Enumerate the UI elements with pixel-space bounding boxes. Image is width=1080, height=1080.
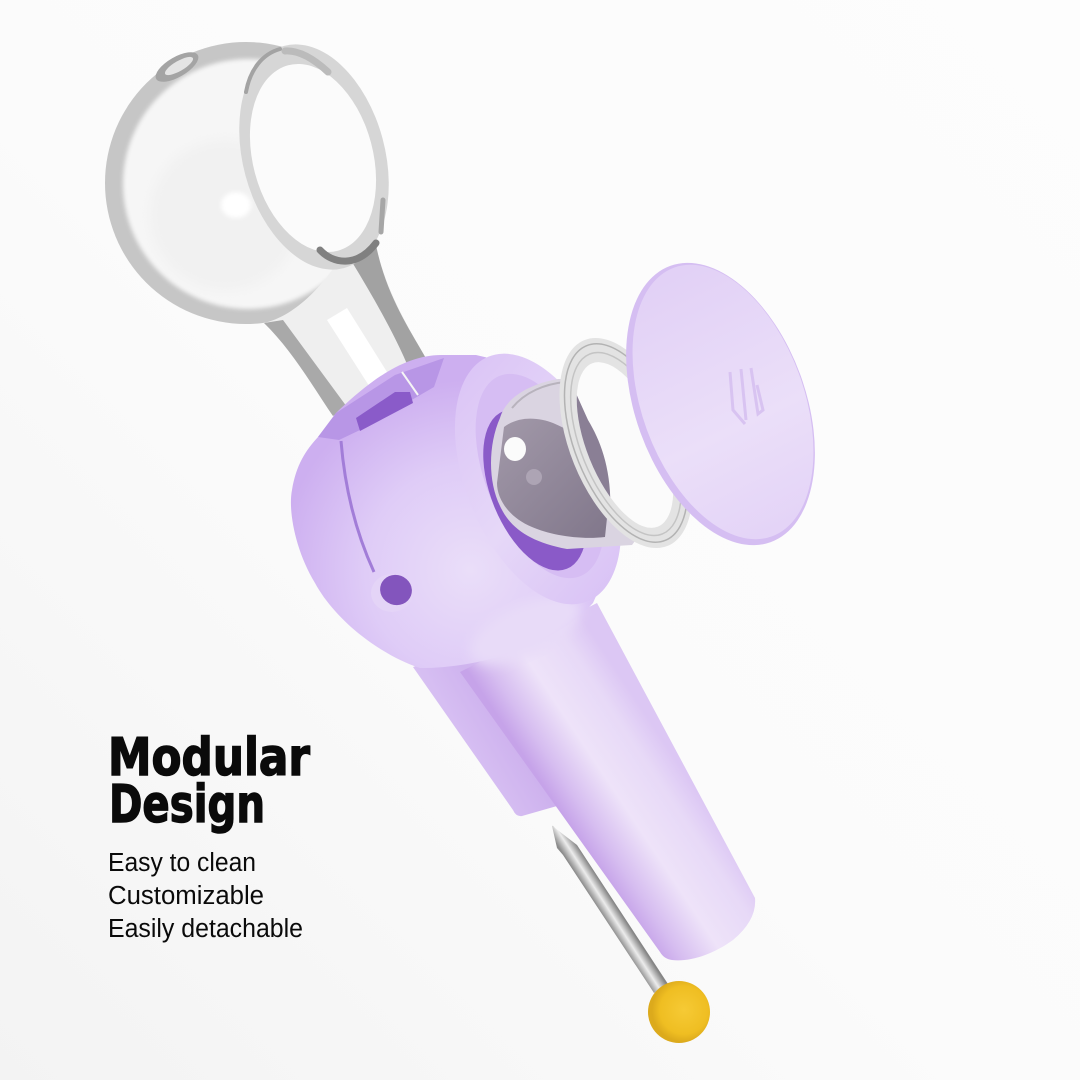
feature list: Easy to clean — [108, 849, 256, 877]
stem socket — [318, 358, 444, 440]
heading: Design — [109, 775, 265, 835]
purple disc lid — [590, 237, 851, 571]
slot in sphere — [341, 441, 374, 572]
bowl sphere — [105, 42, 387, 324]
logo mark — [730, 368, 763, 424]
glass bowl and stem — [105, 28, 427, 416]
sphere — [291, 355, 612, 668]
bowl rim — [216, 28, 412, 286]
feature list: Easily detachable — [108, 915, 303, 943]
carb hole — [151, 46, 203, 88]
lower flap — [413, 640, 557, 816]
purple silicone body — [291, 330, 755, 960]
yellow ball — [648, 981, 710, 1043]
feature list: Customizable — [108, 882, 264, 910]
feature list — [108, 849, 303, 943]
bowl opening — [230, 50, 396, 266]
cup interior lens — [497, 419, 612, 538]
glass cup — [491, 338, 690, 549]
ring inner lip — [449, 356, 631, 596]
stem — [264, 245, 427, 416]
heading: Modular — [108, 728, 310, 788]
ring hole — [462, 395, 608, 585]
slot hole — [371, 570, 416, 612]
junction blend — [460, 581, 590, 679]
cup body — [491, 379, 680, 549]
ring — [422, 330, 654, 628]
infographic canvas — [105, 42, 815, 1043]
poker pin — [552, 826, 710, 1043]
cup opening — [557, 349, 693, 541]
heading — [108, 728, 310, 835]
cup rim — [532, 319, 720, 567]
handle — [460, 603, 755, 960]
